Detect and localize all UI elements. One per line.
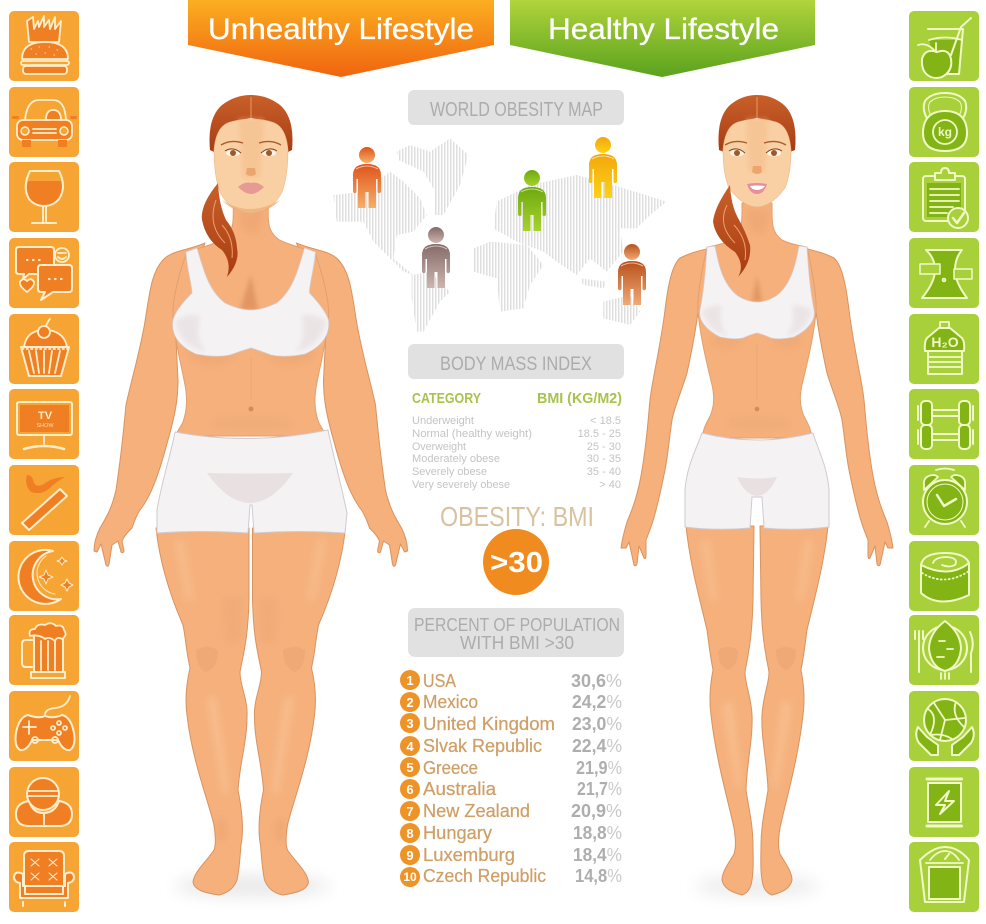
rank numbers: 5 <box>406 760 414 775</box>
foot shadow <box>695 876 819 896</box>
table: BMI categories: Moderately obese <box>412 453 500 465</box>
ponytail <box>202 183 238 277</box>
percentages: 14,8% <box>575 866 622 886</box>
rank numbers: 1 <box>406 673 414 688</box>
left arm <box>94 243 205 566</box>
bra shading <box>175 315 326 352</box>
torso shading <box>712 210 802 429</box>
panel: unhealthy habit icons <box>9 11 79 912</box>
callout: obesity BMI threshold: >30 <box>490 547 543 579</box>
table: BMI categories: > 40 <box>599 479 621 491</box>
icon: cupcake <box>9 314 79 384</box>
shorts inner panel <box>207 473 293 503</box>
shorts inner panel <box>737 477 777 496</box>
icon: plate with carrot and cutlery <box>909 615 979 685</box>
navel and midline <box>248 358 254 412</box>
callout: obesity BMI threshold <box>440 501 594 595</box>
icon: burger and fries <box>9 11 79 81</box>
icon: clipboard checklist <box>909 162 979 232</box>
heading: percent of population: WITH BMI >30 <box>460 633 574 653</box>
icon: game controller <box>9 691 79 761</box>
rank numbers: 4 <box>406 739 414 754</box>
bra <box>173 248 329 356</box>
icon: measuring tape roll <box>909 541 979 611</box>
left arm <box>621 243 728 566</box>
list: top ten countries by obesity <box>400 670 622 887</box>
banner: healthy lifestyle: Healthy Lifestyle <box>548 13 779 46</box>
leg shading <box>700 540 814 790</box>
icon: dumbbells <box>909 389 979 459</box>
icon: water bottle H2O: H₂O <box>931 334 959 350</box>
table: BMI categories <box>412 390 622 491</box>
rank numbers: 6 <box>406 782 414 797</box>
banner: healthy lifestyle <box>510 0 815 77</box>
percentages: 23,0% <box>572 714 622 734</box>
heading: body mass index: BODY MASS INDEX <box>440 354 592 375</box>
heading: percent of population <box>408 608 624 657</box>
left leg <box>686 526 754 895</box>
person marker: north america <box>353 147 381 208</box>
icon: beer mug <box>9 615 79 685</box>
callout: obesity BMI threshold: OBESITY: BMI <box>440 501 594 532</box>
table: BMI categories: Very severely obese <box>412 479 510 491</box>
icon: alarm clock <box>909 465 979 535</box>
table: BMI categories: Normal (healthy weight) <box>412 428 532 440</box>
icon: moon and stars <box>9 541 79 611</box>
percentages: 20,9% <box>571 801 622 821</box>
rank numbers: 10 <box>403 870 417 884</box>
person marker: australia <box>618 244 646 305</box>
table: BMI categories: Severely obese <box>412 466 487 478</box>
table: BMI categories: 25 - 30 <box>587 441 621 453</box>
ponytail <box>713 185 750 277</box>
percentages: 21,9% <box>576 758 622 778</box>
country names: Hungary <box>423 823 492 843</box>
icon: waist with measuring tape <box>909 238 979 308</box>
navel and midline <box>755 345 759 411</box>
smiling lips <box>747 183 767 194</box>
person marker: asia <box>589 137 617 198</box>
country names: New Zealand <box>423 801 530 821</box>
map stripes <box>333 138 667 332</box>
hair part <box>756 97 758 118</box>
torso shading <box>185 210 317 429</box>
cleavage shadow <box>240 275 258 310</box>
kneecaps <box>718 647 796 670</box>
eyes and brows <box>221 141 281 156</box>
country names <box>423 671 555 886</box>
hair top <box>718 95 796 152</box>
country names: Czech Republic <box>423 866 546 886</box>
rank badges <box>400 670 420 887</box>
icon: kettlebell <box>909 87 979 157</box>
leg shading <box>174 540 327 842</box>
rank numbers: 9 <box>406 848 414 863</box>
right arm <box>296 243 408 566</box>
table: BMI categories: 18.5 - 25 <box>578 428 621 440</box>
right arm <box>786 243 893 566</box>
country names: Slvak Republic <box>423 736 542 756</box>
face <box>723 119 791 207</box>
table: BMI categories: CATEGORY <box>412 390 481 407</box>
icon: wine glass <box>9 162 79 232</box>
country names: Mexico <box>423 692 478 712</box>
torso <box>173 200 329 436</box>
icon: TV show: SHOW <box>36 423 54 429</box>
icon: water bottle H2O <box>909 314 979 384</box>
icon: TV show <box>9 389 79 459</box>
nose <box>246 168 256 176</box>
foot shadow <box>174 875 330 897</box>
heading: world obesity map <box>408 90 624 125</box>
heading: body mass index <box>408 344 624 379</box>
kneecaps <box>196 647 305 672</box>
percentages: 21,7% <box>577 779 622 799</box>
percentages <box>571 671 622 886</box>
percentages: 22,4% <box>572 736 622 756</box>
bra shading <box>702 306 812 336</box>
country names: Australia <box>423 779 497 799</box>
right leg <box>252 528 346 895</box>
shorts <box>157 430 347 533</box>
icon: volleyball in hands <box>909 691 979 761</box>
chart: striped world map <box>333 137 667 332</box>
rank numbers: 2 <box>406 695 414 710</box>
country names: United Kingdom <box>423 714 555 734</box>
hair top <box>210 95 292 152</box>
icon: juice and apple <box>909 11 979 81</box>
icon: bathroom scale <box>909 842 979 912</box>
icon: chat bubbles <box>9 238 79 308</box>
rank numbers: 7 <box>406 804 414 819</box>
table: BMI categories: < 18.5 <box>590 415 621 427</box>
hair part <box>250 97 252 118</box>
torso <box>698 203 816 438</box>
icon: energy bar <box>909 767 979 837</box>
icon: cigarette and smoke <box>9 465 79 535</box>
icon: TV show: TV <box>38 410 53 422</box>
country names: Greece <box>423 758 478 778</box>
rank numbers <box>403 673 417 884</box>
panel: healthy habit icons <box>909 11 979 912</box>
lips <box>238 182 264 194</box>
person marker: south america <box>422 227 450 288</box>
left leg <box>156 528 249 895</box>
icon: car <box>9 87 79 157</box>
icon: kettlebell: kg <box>938 125 952 139</box>
banner: unhealthy lifestyle: Unhealthy Lifestyle <box>208 13 474 46</box>
rank numbers: 8 <box>406 826 414 841</box>
figure: healthy woman <box>621 95 893 896</box>
icon: armchair <box>9 842 79 912</box>
heading: world obesity map: WORLD OBESITY MAP <box>430 99 603 121</box>
person marker: europe <box>518 170 546 231</box>
percentages: 30,6% <box>571 671 622 691</box>
figure: unhealthy woman <box>94 95 408 897</box>
teeth <box>750 186 765 190</box>
table: BMI categories: 35 - 40 <box>587 466 621 478</box>
icon: person silhouette <box>9 767 79 837</box>
table: BMI categories: Overweight <box>412 441 466 453</box>
table: BMI categories: 30 - 35 <box>587 453 621 465</box>
percentages: 18,4% <box>573 845 622 865</box>
country names: USA <box>423 671 456 691</box>
bra <box>700 246 814 339</box>
table: BMI categories: BMI (KG/M2) <box>537 390 622 407</box>
heading: percent of population: PERCENT OF POPULATION <box>414 615 620 635</box>
percentages: 24,2% <box>572 692 622 712</box>
cleavage shadow <box>752 276 762 302</box>
face <box>214 119 288 213</box>
table: BMI categories: Underweight <box>412 415 474 427</box>
banner: unhealthy lifestyle <box>188 0 494 77</box>
shorts <box>685 433 829 529</box>
nose <box>752 166 762 174</box>
rank numbers: 3 <box>406 716 414 731</box>
country names: Luxemburg <box>423 845 515 865</box>
eyes and brows <box>725 141 786 156</box>
percentages: 18,8% <box>573 823 622 843</box>
right leg <box>760 526 828 895</box>
